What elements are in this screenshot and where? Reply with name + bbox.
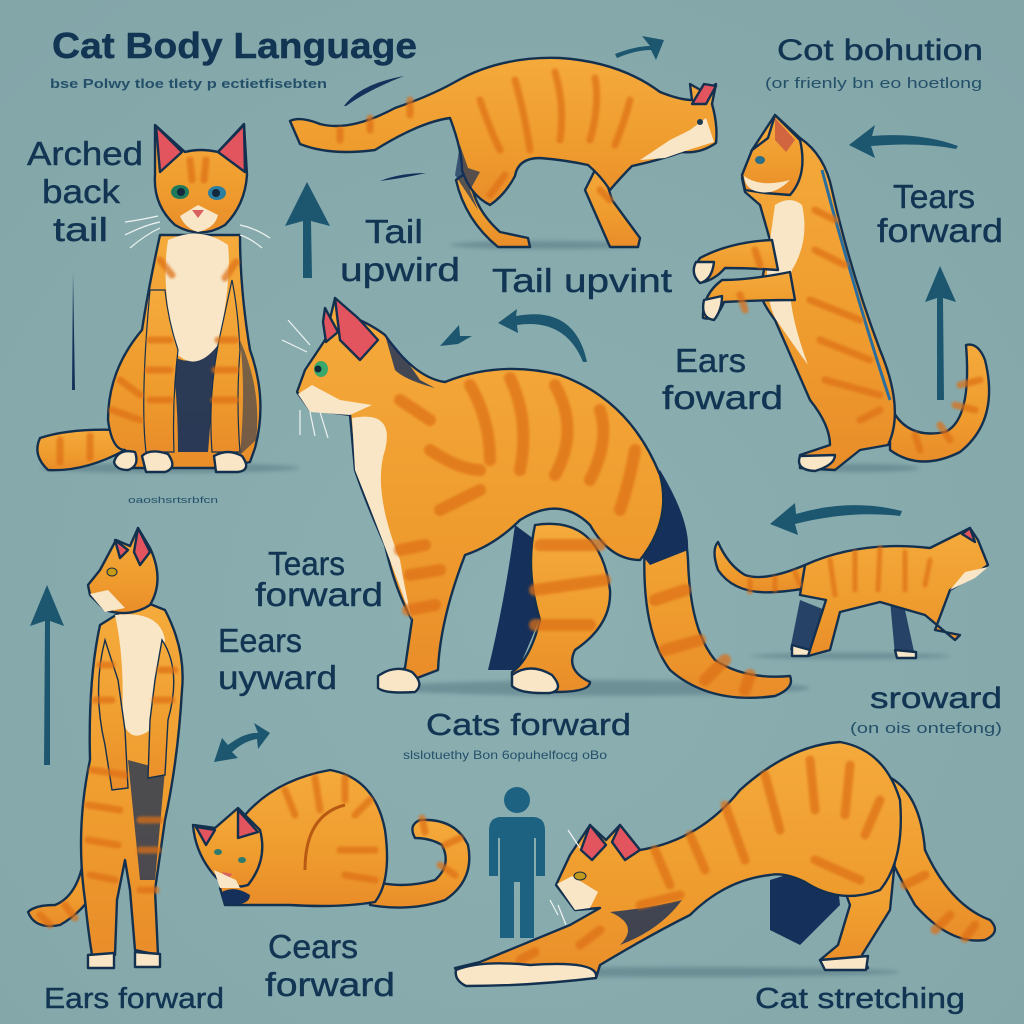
whiskers (282, 320, 328, 438)
label: tail upwird (340, 213, 460, 288)
right haunch shade (240, 340, 257, 455)
blue back line (822, 170, 890, 400)
muzzle (90, 590, 125, 612)
ears (156, 125, 245, 172)
label: eears uyward (218, 622, 337, 696)
cat: mid right walking (714, 528, 988, 659)
caption: sroward: (on ois ontefong) (850, 720, 1002, 737)
eye (574, 872, 586, 880)
label: ears foward: Ears (675, 342, 746, 379)
lower arm (703, 272, 795, 319)
chest shade (610, 900, 682, 945)
label: arched back tail: back (42, 173, 121, 210)
cat: bottom right stretching (455, 742, 995, 986)
eyes and nose (214, 849, 246, 880)
arrow: top right (849, 125, 958, 158)
tail (890, 345, 989, 462)
stripes (40, 665, 175, 925)
white chest (166, 234, 229, 362)
eye (107, 568, 117, 576)
cat: top walking arched (290, 58, 716, 249)
head (155, 124, 247, 232)
far front leg (585, 160, 640, 247)
label: cat stretching: Cat stretching (755, 983, 965, 1015)
tail (37, 430, 125, 470)
subheading: cot bohution: (or frienly bn eo hoetlong (765, 75, 982, 92)
paws (694, 262, 835, 471)
body (800, 528, 988, 656)
stripes (285, 778, 460, 880)
head (193, 808, 262, 887)
arrow: up centre-left (285, 182, 330, 278)
stripes (340, 72, 630, 200)
label: ears foward (662, 342, 783, 416)
nose (192, 210, 204, 218)
arrow: top small (615, 36, 664, 60)
label: tears forward right (877, 178, 1003, 249)
body (220, 770, 387, 906)
cat: upper right rearing (694, 115, 989, 472)
ears (581, 825, 640, 860)
cat: bottom-left standing (28, 528, 183, 968)
arrow: swish top (344, 76, 404, 106)
tail (370, 820, 469, 908)
hind leg (820, 850, 895, 968)
body (297, 298, 663, 680)
label: ears forward: Ears forward (44, 983, 224, 1015)
label: tail upvint: Tail upvint (492, 262, 672, 299)
tail (714, 542, 815, 592)
white chest (767, 200, 808, 365)
arrow: thin vertical left (72, 272, 75, 390)
dark rim (455, 145, 480, 210)
label: arched back tail (27, 135, 143, 248)
body (742, 115, 895, 470)
eye (697, 119, 703, 125)
label: tiny caption: oaoshsrtsrbfcn (128, 495, 218, 505)
dark belly (172, 345, 218, 452)
dark rim behind thigh (630, 470, 688, 565)
arms (98, 640, 174, 790)
ears (196, 810, 258, 845)
head shade (385, 335, 435, 388)
dark inner (128, 760, 165, 880)
stripes (400, 378, 750, 690)
label: sroward: sroward (870, 682, 1002, 715)
muzzle (950, 567, 988, 590)
paws (114, 451, 246, 472)
stripes (750, 548, 930, 595)
paws (88, 952, 160, 968)
label: tears forward centre: forward (255, 576, 383, 613)
ear (692, 84, 716, 104)
shadow (450, 241, 640, 249)
tail (644, 470, 791, 698)
label: tears forward centre: Tears (268, 545, 345, 582)
eye (755, 156, 765, 164)
ears (335, 298, 378, 360)
tail (880, 775, 995, 941)
heading: cot bohution: Cot bohution (777, 34, 983, 67)
arrow: curved centre (498, 309, 587, 362)
far legs (790, 600, 915, 656)
eye (314, 361, 328, 377)
arrow: up bottom-left (30, 585, 64, 765)
dark far leg (488, 525, 562, 670)
stripes (520, 760, 975, 960)
label: tail upwird: upwird (340, 251, 460, 288)
paw (222, 889, 250, 905)
ear (775, 118, 795, 152)
label: eears uyward: uyward (218, 659, 337, 696)
subtitle: bse Polwy tloe tlety p ectietfisebten (50, 76, 327, 91)
label: ears foward: foward (662, 379, 783, 416)
eyes (171, 185, 226, 200)
label: arched back tail: Arched (27, 135, 143, 172)
title: Cat Body Language (52, 25, 417, 66)
paws (456, 956, 868, 986)
right leg (211, 280, 240, 452)
label: cears forward: forward (265, 966, 395, 1003)
stripes (740, 210, 980, 450)
haunch line (305, 805, 345, 870)
label: tears forward centre (255, 545, 383, 613)
muzzle (214, 870, 240, 888)
label: cears forward: Cears (268, 928, 358, 965)
white chest (640, 118, 714, 160)
shadow (800, 464, 920, 472)
cat: top-left sitting (37, 124, 300, 473)
upper arm (695, 240, 778, 283)
white chest (115, 614, 165, 736)
shadow (390, 680, 810, 696)
label: cats forward: Cats forward (426, 707, 631, 742)
arrow: swish small (380, 173, 426, 181)
cat: centre large (282, 298, 810, 698)
paws (378, 668, 558, 693)
whiskers (125, 216, 270, 248)
muzzle (298, 385, 372, 415)
whiskers (550, 830, 580, 925)
label: cears forward (265, 928, 395, 1003)
far hind leg (456, 170, 530, 247)
arrow: up right (925, 266, 956, 400)
left leg (144, 290, 178, 452)
ears (115, 528, 150, 565)
body (108, 235, 260, 468)
muzzle (180, 205, 218, 232)
shadow (460, 967, 900, 977)
label: eears uyward: Eears (218, 622, 302, 659)
body (81, 600, 183, 955)
body (455, 742, 901, 985)
arrow: small head centre (440, 325, 472, 346)
white chest (352, 417, 412, 620)
hind far leg dark (770, 860, 840, 945)
body (290, 58, 716, 205)
shadow (750, 653, 950, 659)
arrow: mid right (770, 503, 902, 535)
cat: bottom curled (193, 770, 469, 908)
arrow: small curved (214, 723, 270, 762)
ear (962, 528, 975, 542)
hind leg (512, 524, 610, 692)
head (742, 115, 802, 195)
tail (28, 850, 100, 926)
stripes (60, 160, 236, 462)
label: tears forward right: Tears (893, 178, 975, 215)
shadow (40, 463, 300, 473)
icon: person figure (489, 787, 545, 938)
label: tail upwird: Tail (365, 213, 423, 250)
caption: cats forward: slslotuethy Bon 6opuhelfocg oBo (403, 748, 607, 762)
label: arched back tail: tail (53, 211, 108, 248)
muzzle (744, 176, 790, 192)
label: tears forward right: forward (877, 212, 1003, 249)
head (88, 528, 158, 613)
paws (792, 645, 916, 658)
white muzzle (557, 876, 598, 910)
